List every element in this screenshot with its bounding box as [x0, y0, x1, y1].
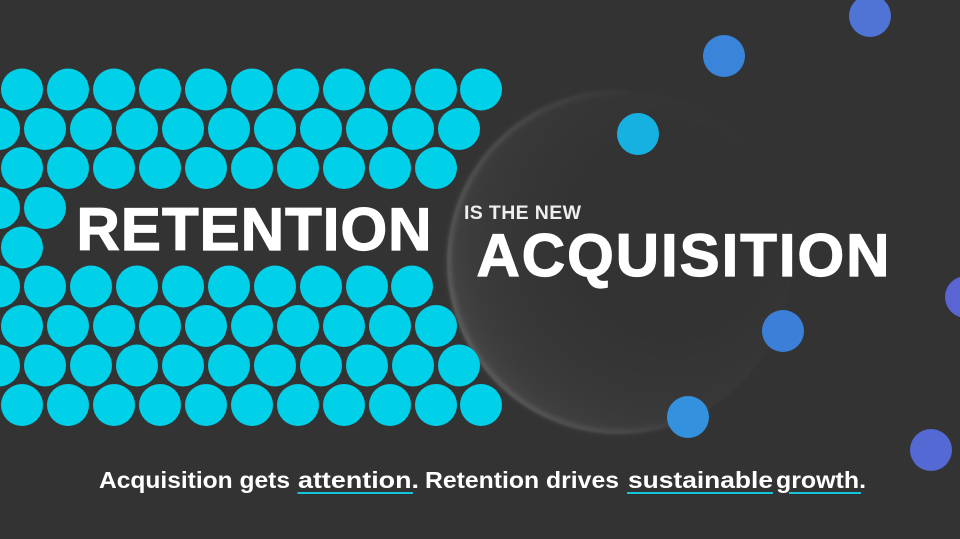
heading: acquisition: ACQUISITION	[476, 222, 890, 289]
heading: is the new: IS THE NEW	[464, 202, 582, 224]
glowing sphere	[447, 90, 791, 434]
tagline: sustainable	[628, 467, 773, 493]
tagline	[99, 467, 866, 494]
tagline: growth.	[776, 467, 866, 493]
tagline: attention.	[298, 467, 419, 493]
tagline: Acquisition gets	[99, 467, 290, 493]
underline: sustainable	[627, 492, 773, 494]
drifting dots	[617, 0, 960, 471]
underline: growth	[789, 492, 861, 494]
circle grid: bottom block	[0, 266, 502, 426]
circle grid: top block	[0, 68, 502, 268]
tagline: Retention drives	[425, 467, 619, 493]
underline: attention	[298, 492, 413, 494]
heading: retention: RETENTION	[76, 196, 432, 263]
